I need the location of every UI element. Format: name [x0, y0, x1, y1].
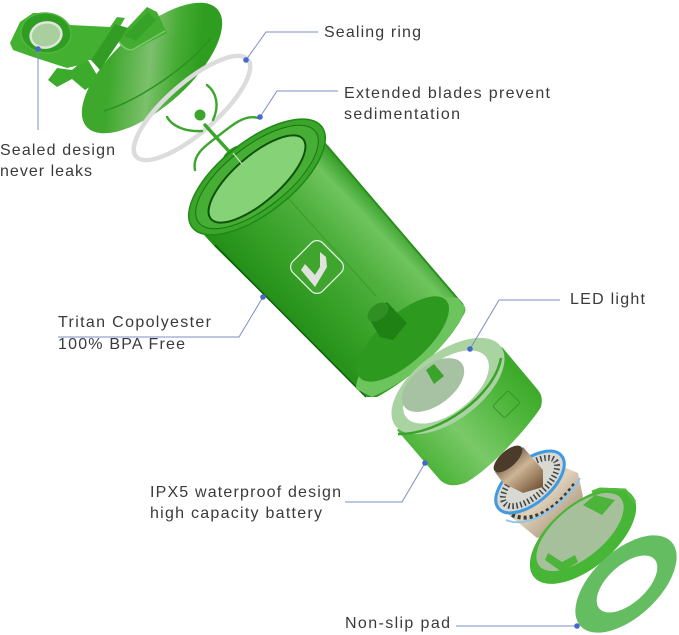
copper motor core — [495, 447, 543, 493]
base center disc — [392, 347, 474, 423]
rim — [170, 98, 344, 256]
callout: waterproof: IPX5 waterproof design — [150, 484, 341, 501]
cup post — [368, 302, 407, 340]
lid disc — [61, 0, 243, 155]
cup base band — [356, 297, 465, 397]
callout: sealing ring: Sealing ring — [324, 24, 421, 41]
callout: sealed design — [0, 46, 115, 180]
bottom cap — [513, 470, 653, 602]
motor housing — [503, 467, 583, 538]
blades — [167, 85, 258, 170]
callout: tritan: 100% BPA Free — [58, 336, 185, 353]
blue ring — [485, 440, 575, 524]
non-slip pad — [558, 518, 679, 635]
flip cap strap — [10, 13, 125, 68]
callout: sealed design: Sealed design — [0, 142, 115, 159]
silicone plug — [28, 20, 64, 50]
callout: waterproof — [150, 460, 428, 522]
callout: tritan: Tritan Copolyester — [58, 314, 212, 331]
callout: LED light — [467, 291, 646, 352]
callout: sealing ring — [243, 24, 421, 63]
callout: LED light: LED light — [570, 291, 646, 308]
flip cap hook — [48, 60, 100, 90]
callout: waterproof: high capacity battery — [150, 505, 322, 522]
callout: non-slip pad — [345, 615, 580, 632]
cup opening — [196, 122, 318, 236]
logo — [287, 237, 347, 297]
sealing ring — [120, 41, 264, 175]
callout: sealed design: never leaks — [0, 163, 92, 180]
shaft — [426, 364, 444, 384]
hinge arm — [91, 24, 128, 70]
base top surface — [375, 319, 521, 453]
callout: extended blades: Extended blades prevent — [344, 85, 551, 102]
cup — [170, 98, 465, 397]
spout — [116, 7, 167, 52]
usb icon — [493, 391, 520, 418]
lid — [10, 0, 243, 155]
cup inner bottom — [344, 282, 462, 396]
callout: non-slip pad: Non-slip pad — [345, 615, 450, 632]
callout: extended blades: sedimentation — [344, 106, 460, 123]
motor — [485, 440, 583, 538]
callout: tritan — [58, 294, 266, 353]
LED ring — [390, 336, 502, 438]
callout: extended blades — [257, 85, 551, 123]
blade base tick — [233, 153, 242, 164]
motor base — [375, 319, 542, 485]
measuring marks — [288, 198, 376, 296]
cap bowl — [19, 11, 73, 55]
cup body — [195, 135, 465, 397]
base body — [397, 347, 542, 485]
